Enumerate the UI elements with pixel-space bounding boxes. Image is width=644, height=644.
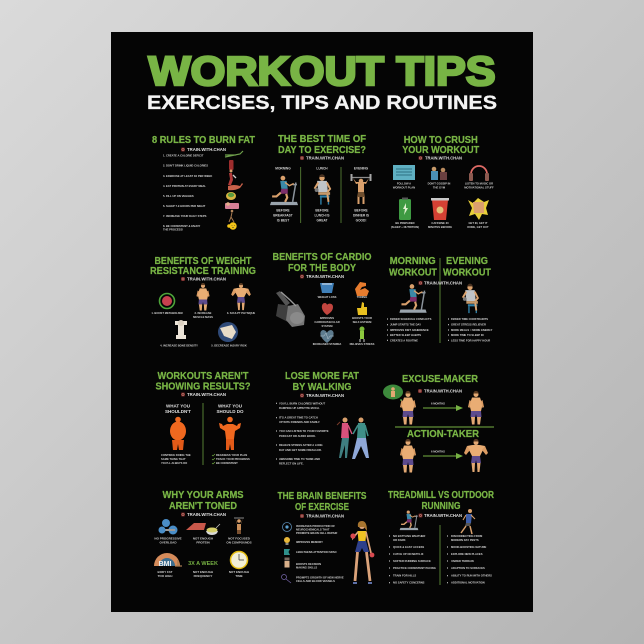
- heading: [272, 252, 372, 274]
- column: lunch: BEFORE: [315, 208, 329, 212]
- heading: WORKOUTS AREN'T: [158, 371, 248, 382]
- panel: lose more fat by walking: [276, 371, 369, 466]
- icon: relieves stress: RELIEVES STRESS: [350, 342, 375, 346]
- heading: RESISTANCE TRAINING: [150, 266, 256, 277]
- heading: DAY TO EXERCISE?: [278, 145, 366, 156]
- subtitle: EXERCISES, TIPS AND ROUTINES: [147, 93, 497, 114]
- benefit text: PROMPTS GROWTH OF NEW NERVE: [296, 576, 344, 580]
- icon: coffee cup: MINUTES BEFORE: [428, 225, 452, 229]
- heading: BENEFITS OF WEIGHT: [154, 256, 252, 267]
- column: what you should do: BE CONSISTENT: [216, 461, 238, 465]
- icon: steak and bowl: NOT ENOUGH: [193, 536, 213, 540]
- icon: thumbs up: BOOSTS YOUR: [352, 316, 372, 320]
- brand tag: TRAIN.WITH.CHAN: [187, 277, 226, 282]
- rules list: [163, 154, 212, 232]
- heading: morning: [389, 256, 437, 278]
- heading: evening: WORKOUT: [443, 268, 491, 278]
- treadmill list: SOFTER RUNNING SURFACE: [393, 559, 431, 563]
- panel: 8 rules to burn fat: [152, 135, 255, 232]
- tips list: REFLECT ON LIFE.: [279, 462, 304, 466]
- outdoor list: [447, 534, 492, 584]
- benefit: bone density: 4. INCREASE BONE DENSITY: [160, 344, 198, 348]
- benefit text: [296, 524, 344, 583]
- action-taker before: [400, 439, 416, 472]
- heading: BY WALKING: [292, 382, 352, 393]
- heading: evening: EVENING: [446, 256, 488, 267]
- rules list: 7. INCREASE YOUR DAILY STEPS: [163, 214, 207, 218]
- heading: morning: MORNING: [390, 256, 436, 267]
- brand tag: TRAIN.WITH.CHAN: [306, 274, 344, 279]
- column: evening: DINNER IS: [353, 214, 369, 218]
- brand tag: TRAIN.WITH.CHAN: [306, 514, 344, 519]
- icon: clock: NOT ENOUGH: [229, 570, 249, 574]
- excuse-maker before: [400, 391, 416, 424]
- heading: morning: WORKOUT: [389, 268, 437, 278]
- icon: heart: SYSTEM: [321, 324, 333, 328]
- icon: toning: TONING: [357, 295, 367, 299]
- column: what you shouldn't: SHOULDN'T: [165, 409, 191, 414]
- icon: weight loss: WEIGHT LOSS: [318, 295, 337, 299]
- icon: pull-up figure: ON COMPOUNDS: [226, 540, 252, 544]
- heading: TREADMILL VS OUTDOOR: [388, 490, 495, 501]
- heading: SHOWING RESULTS?: [156, 382, 250, 392]
- evening list: [448, 317, 493, 342]
- morning list: FEWER SCHEDULE CONFLICTS: [390, 317, 432, 321]
- tips list: RAMPING UP APPETITE MUCH.: [279, 406, 320, 410]
- icon: workout plan: [393, 165, 415, 190]
- heading: AREN'T TONED: [169, 501, 237, 512]
- column: what you should do: TRACK YOUR PROGRESS: [216, 457, 250, 461]
- icon: battery: [391, 198, 419, 229]
- benefit: injury risk: 5. DECREASE INJURY RISK: [211, 344, 247, 348]
- rule icons: [225, 151, 243, 230]
- rules list: 2. DON'T DRINK LIQUID CALORIES: [163, 164, 208, 168]
- woman with dumbbells: [350, 521, 374, 583]
- elliptical machine: [276, 291, 305, 327]
- column: lunch: GREAT: [317, 218, 328, 222]
- heading: THE BRAIN BENEFITS: [278, 491, 367, 502]
- icon: heart: IMPROVES: [320, 316, 334, 320]
- evening list: LESS TIME FOR HAPPY HOUR: [451, 338, 490, 342]
- excuse-maker after: [468, 391, 484, 424]
- heading: OF EXERCISE: [295, 502, 349, 513]
- outdoor list: ADAPTION TO SURFACES: [451, 566, 485, 570]
- outdoor list: ABILITY TO RUN WITH OTHERS: [451, 574, 492, 578]
- benefit text: INCREASES PRODUCTION OF: [296, 524, 335, 528]
- icon: headphones: [464, 166, 494, 190]
- column: what you should do: SHOULD DO: [216, 409, 244, 414]
- icon: coffee cup: CAFFEINE 30: [431, 221, 449, 225]
- brand tag: TRAIN.WITH.CHAN: [425, 156, 462, 161]
- brand tag: TRAIN.WITH.CHAN: [187, 512, 226, 517]
- icon: pull-up figure: [226, 518, 252, 544]
- tips list: AWESOME TIME TO THINK AND: [279, 457, 320, 461]
- tips list: IT'S A GREAT TIME TO CATCH: [279, 416, 318, 420]
- icon: battery: (SLEEP + NUTRITION): [391, 225, 419, 229]
- benefit text: MAKING SKILLS: [296, 566, 317, 570]
- rules list: 5. FILL UP ON VEGGIES: [163, 194, 194, 198]
- icon: coffee cup: [428, 198, 452, 229]
- panel: why your arms aren't toned: [154, 490, 252, 578]
- benefit: muscle mass: 2. INCREASE: [195, 311, 212, 315]
- icon: BMI gauge: BODY FAT: [158, 570, 173, 574]
- benefit text: BOOSTS DECISION: [296, 562, 321, 566]
- 3x a week label: [188, 561, 218, 578]
- tips list: RELIEVE STRESS AFTER A LONG: [279, 443, 323, 447]
- column: what you shouldn't: CONTINUE DOING THE: [161, 453, 191, 457]
- column: lunch: LUNCH IS: [314, 214, 330, 218]
- column: morning: BREAKFAST: [273, 214, 293, 218]
- treadmill list: TRAIN FOR HILLS: [393, 574, 416, 578]
- 3x a week label: FREQUENCY: [194, 574, 212, 578]
- tips list: UP WITH FRIENDS AND FAMILY.: [279, 420, 320, 424]
- evening list: GREAT STRESS RELIEVER: [451, 323, 486, 327]
- heading: FOR THE BODY: [288, 263, 356, 274]
- rules list: 6. SLEEP 7-9 HOURS PER NIGHT: [163, 204, 206, 208]
- morning list: BETTER SLEEP HABITS: [390, 333, 421, 337]
- brand tag: TRAIN.WITH.CHAN: [187, 147, 226, 152]
- tips list: [276, 401, 329, 466]
- benefit text: LENGTHENS ATTENTION SPAN: [296, 550, 336, 554]
- heading: [388, 490, 495, 512]
- icon: thumbs up: [352, 302, 372, 324]
- icon: headphones: MOTIVATIONAL STUFF: [464, 186, 494, 190]
- morning list: JUMP STARTS THE DAY: [390, 323, 421, 327]
- heading: [278, 491, 367, 513]
- column: what you shouldn't: YOU'LL ALWAYS DO: [161, 461, 187, 465]
- icon: fist: DONE, GET OUT: [467, 225, 489, 229]
- icon: gossip: DON'T GOSSIP IN: [428, 182, 450, 186]
- icon: clock: [229, 552, 249, 578]
- icon: heart: CARDIOVASCULAR: [314, 320, 340, 324]
- tips list: YOU CAN LISTEN TO YOUR FAVORITE: [279, 429, 329, 433]
- action-taker after: [464, 439, 488, 472]
- treadmill list: OR DARK: [393, 538, 406, 542]
- column: morning: MORNING: [275, 166, 291, 170]
- heading: WHY YOUR ARMS: [162, 490, 244, 501]
- poster: [111, 32, 533, 612]
- benefit text: NEUROCHEMICALS THAT: [296, 528, 330, 532]
- arrow: 6 months: 6 MONTHS: [431, 402, 445, 406]
- icon: dumbbells: OVERLOAD: [159, 540, 177, 544]
- column: what you shouldn't: SAME THING THAT: [161, 457, 186, 461]
- thought cloud: [383, 384, 403, 401]
- benefit text: CELLS AND BLOOD VESSELS: [296, 579, 335, 583]
- benefit text: PROMOTE BRAIN CELL REPAIR: [296, 531, 337, 535]
- 3x a week label: 3X A WEEK: [188, 561, 218, 567]
- arrow: 6 months: 6 MONTHS: [431, 450, 445, 454]
- tips list: YOU'LL BURN CALORIES WITHOUT: [279, 401, 325, 405]
- benefit: sculpt physique: 3. SCULPT PHYSIQUE: [227, 311, 255, 315]
- icon: fist: [467, 198, 489, 229]
- column: evening: GOOD!: [356, 218, 366, 222]
- column: what you shouldn't: [161, 404, 191, 465]
- heading: 8 RULES TO BURN FAT: [152, 135, 255, 146]
- brand tag: TRAIN.WITH.CHAN: [424, 513, 462, 518]
- outdoor list: VARIED TERRAIN: [451, 559, 474, 563]
- treadmill list: QUICK & EASY ACCESS: [393, 545, 424, 549]
- benefit icons: [282, 522, 292, 583]
- title: WORKOUT TIPS: [148, 48, 496, 94]
- icon: BMI gauge: TOO HIGH: [158, 574, 172, 578]
- treadmill list: PRACTICE CONSISTENT PACING: [393, 566, 436, 570]
- morning list: IMPROVES DIET ADHERENCE: [390, 328, 429, 332]
- column: what you should do: REASSESS YOUR PLAN: [216, 453, 247, 457]
- column: lunch: [314, 166, 330, 222]
- benefit text: IMPROVES MEMORY: [296, 540, 323, 544]
- icon: clock: TIME: [235, 574, 243, 578]
- heading: BENEFITS OF CARDIO: [272, 252, 372, 263]
- icon: workout plan: FOLLOW A: [397, 182, 411, 186]
- panel: treadmill vs outdoor running: [388, 490, 495, 585]
- treadmill list: CATCH UP ON NETFLIX: [393, 552, 424, 556]
- rules list: 4. EAT PROTEIN AT EVERY MEAL: [163, 184, 206, 188]
- column: what you should do: [212, 404, 250, 465]
- icon: gossip: [428, 167, 450, 190]
- outdoor list: ADDITIONAL MOTIVATION: [451, 580, 485, 584]
- benefit: metabolism: 1. BOOST METABOLISM: [151, 311, 183, 315]
- outdoor list: MOOD-BOOSTING NATURE: [451, 545, 487, 549]
- treadmill list: NO SAFETY CONCERNS: [393, 580, 425, 584]
- morning list: [387, 317, 432, 342]
- column: morning: IS BEST: [277, 218, 289, 222]
- column: what you shouldn't: WHAT YOU: [166, 404, 190, 408]
- brand tag: TRAIN.WITH.CHAN: [424, 388, 462, 394]
- column: evening: BEFORE: [354, 208, 368, 212]
- brand tag: TRAIN.WITH.CHAN: [187, 392, 226, 397]
- heading: LOSE MORE FAT: [285, 371, 359, 382]
- icon: pull-up figure: NOT FOCUSED: [228, 536, 251, 540]
- heading: RUNNING: [422, 501, 461, 512]
- outdoor list: EXPLORE NEW PLACES: [451, 552, 483, 556]
- treadmill list: NO BATTLING WEATHER: [393, 534, 425, 538]
- column: what you should do: WHAT YOU: [218, 404, 242, 408]
- panel: how to crush your workout: [391, 135, 494, 229]
- tips list: PODCAST OR AUDIO BOOK.: [279, 434, 316, 438]
- icon: seated lifter: [463, 284, 478, 313]
- evening list: MORE TIME TO SLEEP IN: [451, 333, 484, 337]
- rules list: 1. CREATE A CALORIE DEFICIT: [163, 154, 204, 158]
- heading: [402, 135, 479, 156]
- heading: action-taker: ACTION-TAKER: [407, 429, 480, 440]
- morning list: CREATES A ROUTINE: [390, 338, 418, 342]
- icon: steak and bowl: PROTEIN: [196, 540, 210, 544]
- heading: [156, 371, 250, 392]
- panel: excuse-maker vs action-taker: [383, 374, 494, 472]
- heading: HOW TO CRUSH: [404, 135, 478, 146]
- icon: dumbbells: [154, 519, 182, 544]
- heading: [162, 490, 244, 512]
- evening list: MORE MEALS = MORE ENERGY: [451, 328, 493, 332]
- icon: BMI gauge: BMI: [159, 561, 171, 568]
- icon: BMI gauge: [154, 553, 182, 578]
- icon: treadmill runner: [400, 510, 418, 530]
- brand tag: TRAIN.WITH.CHAN: [306, 156, 344, 161]
- icon: heart: [314, 303, 340, 328]
- column: lunch: LUNCH: [316, 166, 328, 170]
- panel: morning vs evening workout: [387, 256, 493, 343]
- rules list: 3. EXERCISE AT LEAST 3X PER WEEK: [163, 174, 212, 178]
- panel: benefits of weight resistance training: [150, 256, 256, 348]
- panel: benefits of cardio: [272, 252, 375, 346]
- icon: dumbbells: NO PROGRESSIVE: [154, 536, 182, 540]
- 3x a week label: NOT ENOUGH: [193, 570, 213, 574]
- icon: thumbs up: SELF-ESTEEM: [353, 320, 372, 324]
- column: morning: BEFORE: [276, 208, 290, 212]
- rules list: 8. BE CONSISTENT & ENJOY: [163, 224, 201, 228]
- benefit: muscle mass: MUSCLE MASS: [193, 315, 213, 319]
- icon: battery: BE PREPARED: [395, 221, 415, 225]
- panel: brain benefits of exercise: [278, 491, 374, 583]
- rules list: THE PROCESS!: [163, 228, 183, 232]
- outdoor list: MODERN DAY PESTS: [451, 538, 479, 542]
- brand tag: TRAIN.WITH.CHAN: [424, 281, 462, 286]
- panel: best time of day to exercise: [270, 134, 372, 223]
- panel: workouts aren't showing results: [156, 371, 250, 465]
- evening list: FEWER TIME CONSTRAINTS: [451, 317, 488, 321]
- icon: workout plan: WORKOUT PLAN: [393, 186, 415, 190]
- tips list: DAY AND GET SOME FRESH AIR.: [279, 448, 322, 452]
- outdoor list: DISCONNECTING FROM: [451, 534, 483, 538]
- heading: THE BEST TIME OF: [278, 134, 366, 145]
- column: evening: [350, 166, 372, 222]
- brand tag: TRAIN.WITH.CHAN: [306, 393, 344, 398]
- icon: stamina heart: INCREASED STAMINA: [313, 342, 341, 346]
- heading: evening: [443, 256, 491, 278]
- icon: fist: GET IN, GET IT: [468, 221, 488, 225]
- walking couple: [337, 418, 369, 459]
- benefit: muscle mass: [193, 283, 213, 319]
- icon: steak and bowl: [186, 523, 220, 544]
- icon: treadmill runner: [399, 284, 427, 313]
- icon: outdoor runner: [461, 509, 475, 534]
- heading: [150, 256, 256, 277]
- icon: gossip: THE GYM: [433, 186, 446, 190]
- heading: YOUR WORKOUT: [402, 145, 479, 156]
- column: evening: EVENING: [354, 166, 369, 170]
- treadmill list: [389, 534, 436, 584]
- heading: [285, 371, 359, 393]
- heading: excuse-maker: EXCUSE-MAKER: [402, 374, 479, 385]
- heading: [278, 134, 366, 156]
- icon: headphones: LISTEN TO MUSIC OR: [465, 182, 493, 186]
- column: morning: [270, 166, 298, 222]
